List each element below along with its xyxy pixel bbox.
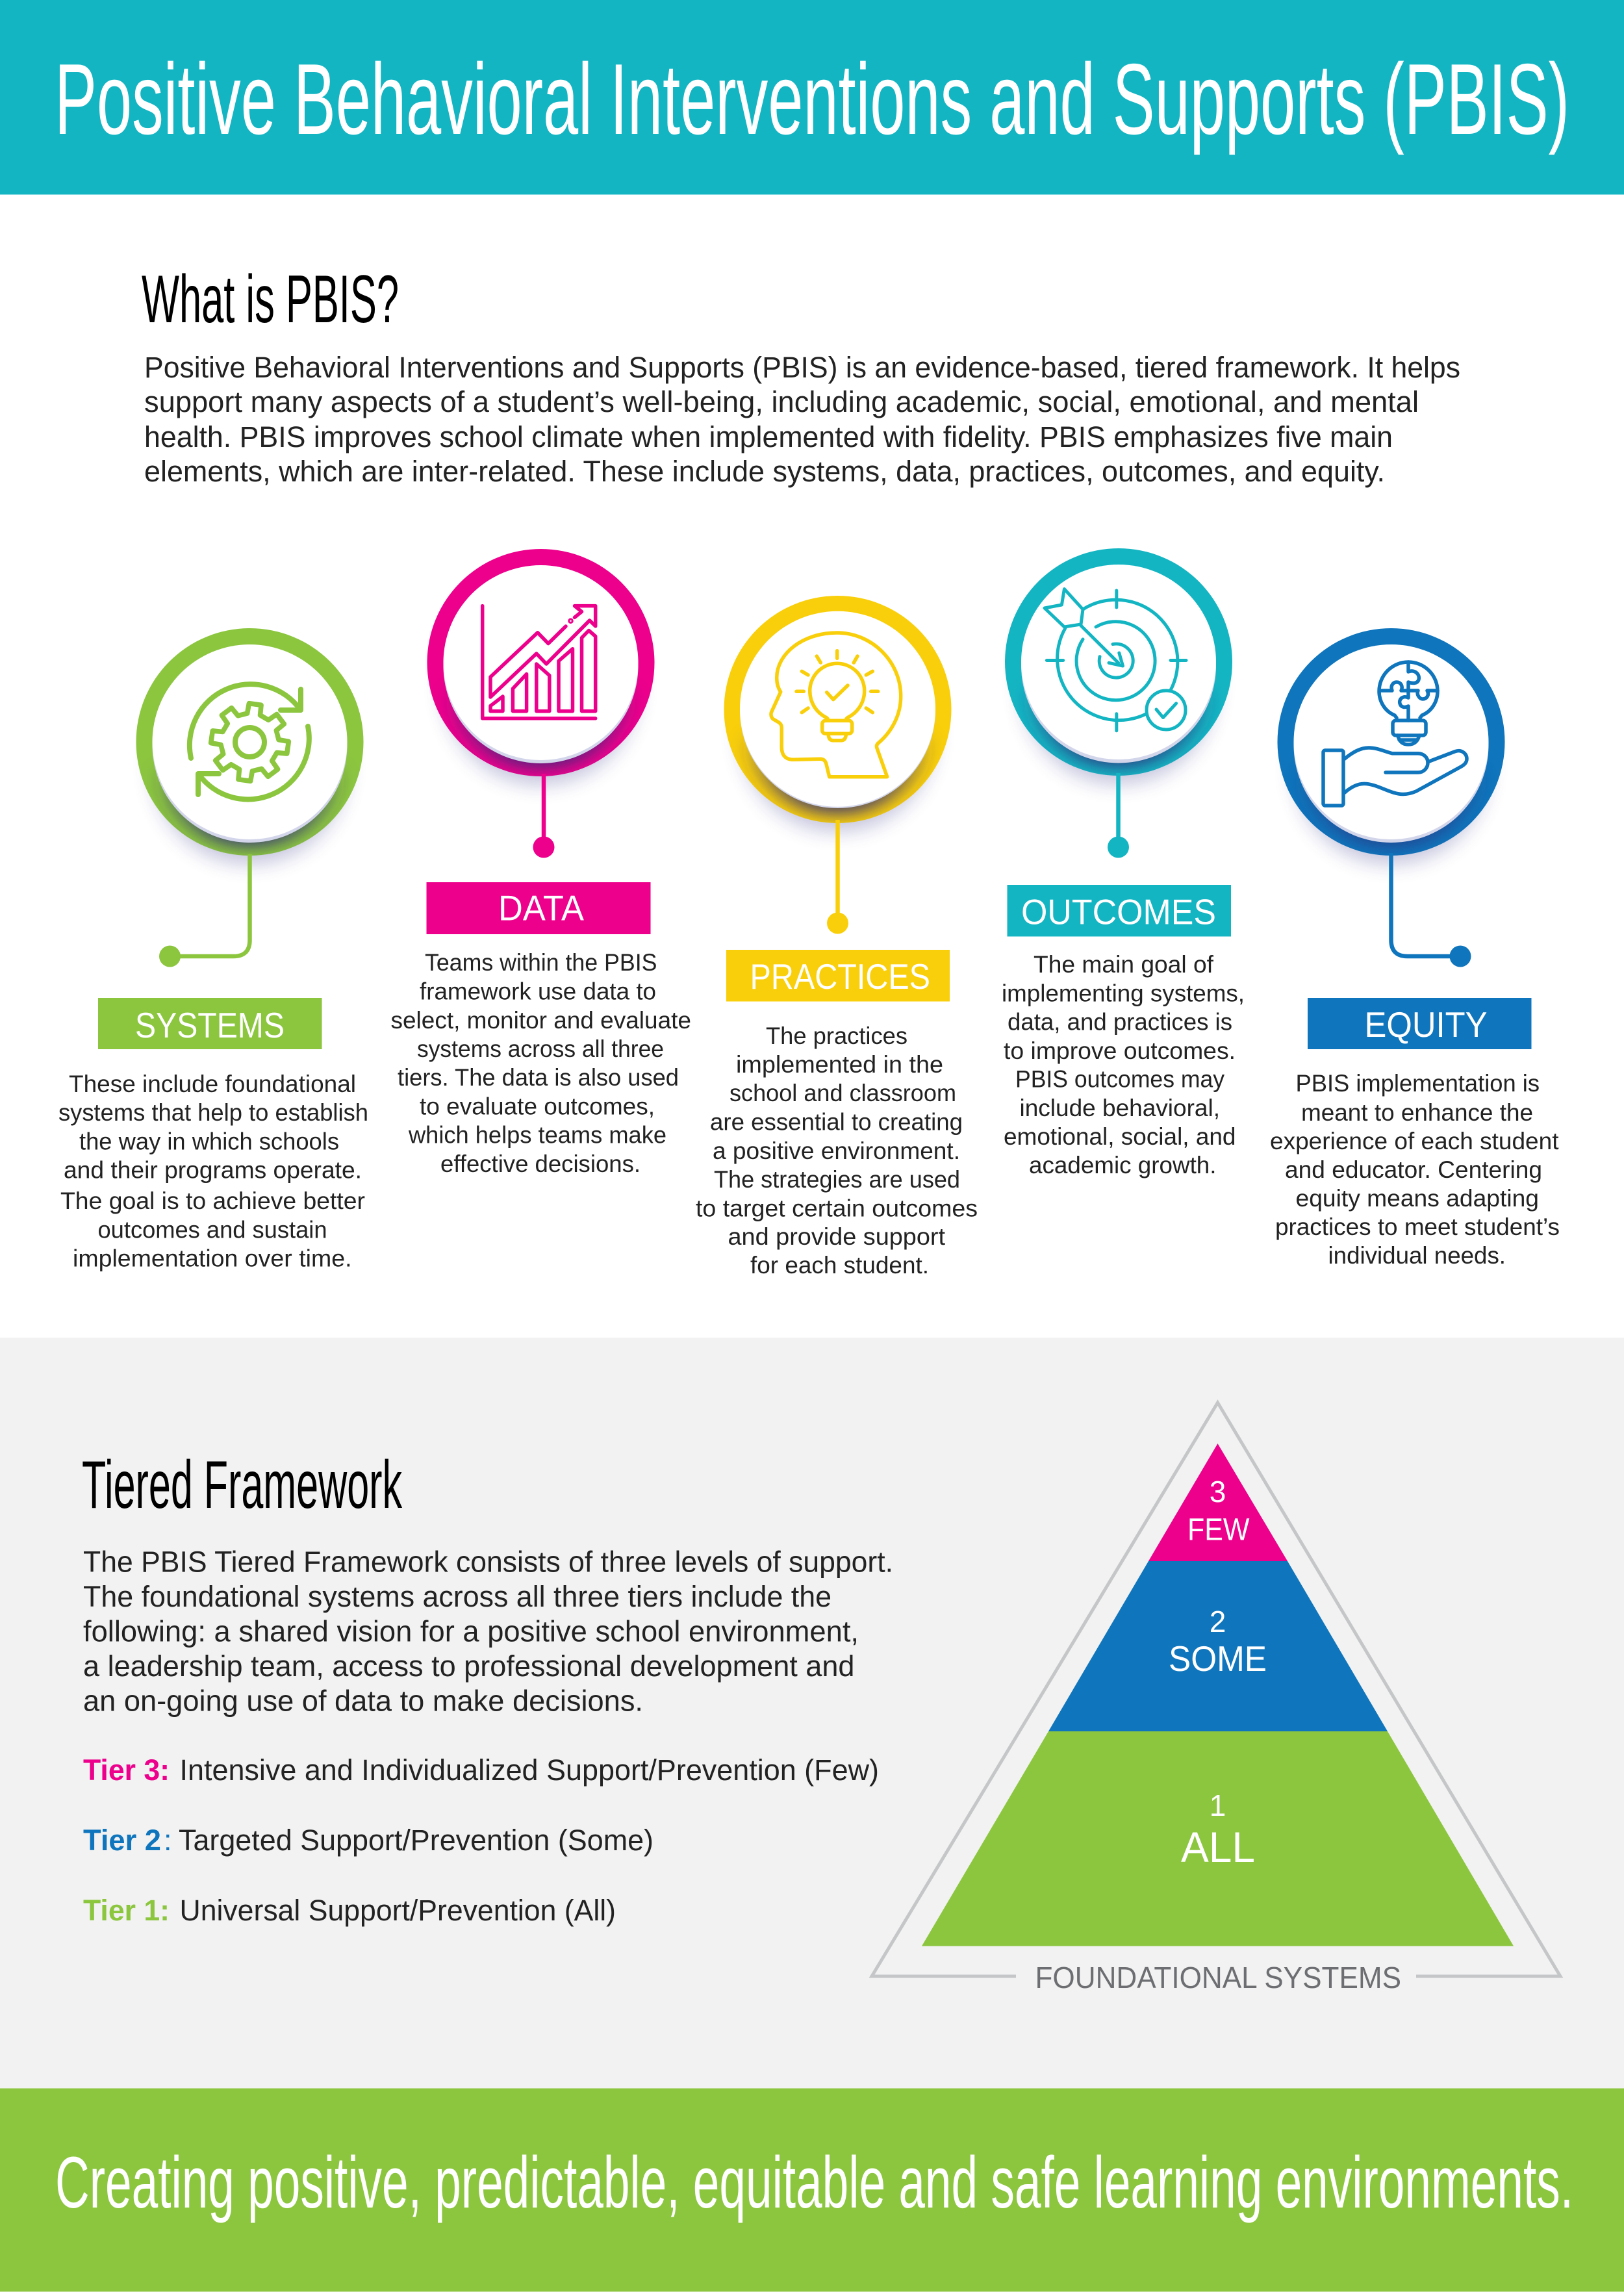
connector: systems	[159, 854, 249, 967]
text: outcomes: data, and practices is	[1008, 1008, 1232, 1036]
text: outcomes: implementing systems,	[1002, 980, 1245, 1007]
text: practices: school and classroom	[730, 1080, 956, 1106]
panel: tiered framework	[0, 1338, 1624, 2089]
tiered framework paragraph: The PBIS Tiered Framework consists of three levels of support.	[83, 1545, 893, 1579]
tier 3 segment: FEW	[1187, 1512, 1250, 1547]
tier 2 segment: SOME	[1169, 1638, 1267, 1679]
text: systems: These include foundational	[69, 1071, 356, 1097]
text: equity: practices to meet student’s	[1275, 1214, 1560, 1240]
text: outcomes	[1002, 951, 1245, 1178]
panel: systems	[58, 628, 368, 1272]
tiered framework paragraph: an on-going use of data to make decisions.	[83, 1684, 643, 1718]
panel: practices	[696, 596, 978, 1279]
icon: hand holding puzzle bulb	[1323, 662, 1467, 806]
circle badge: outcomes	[1005, 548, 1232, 784]
tier 1 line: Universal Support/Prevention (All)	[179, 1894, 616, 1927]
tier 3 segment: 3	[1210, 1475, 1226, 1509]
panel: outcomes	[1002, 548, 1245, 1178]
intro paragraph: health. PBIS improves school climate when implemented with fidelity. PBIS emphasizes five main	[144, 420, 1393, 453]
text: outcomes: to improve outcomes.	[1004, 1038, 1236, 1064]
text: practices	[696, 1023, 978, 1279]
tier 2 line: Targeted Support/Prevention (Some)	[179, 1824, 653, 1857]
circle badge: practices	[724, 596, 951, 832]
foundational systems label: FOUNDATIONAL SYSTEMS	[1035, 1961, 1401, 1994]
header banner	[0, 0, 1624, 195]
text: systems: systems that help to establish	[58, 1099, 368, 1126]
text: practices: and provide support	[728, 1223, 946, 1250]
tier 3 segment	[1148, 1444, 1288, 1561]
connector: equity	[1391, 853, 1471, 967]
text: practices: The practices	[766, 1023, 907, 1049]
tier 1 segment	[922, 1731, 1514, 1946]
text: practices: to target certain outcomes	[696, 1195, 978, 1221]
connector: practices	[827, 820, 848, 934]
label: outcomes: OUTCOMES	[1021, 891, 1216, 932]
label: equity: EQUITY	[1364, 1004, 1488, 1045]
text: equity: meant to enhance the	[1301, 1099, 1533, 1126]
circle badge: systems	[136, 628, 364, 864]
text: systems: and their programs operate.	[64, 1156, 362, 1184]
pyramid chart	[872, 1403, 1560, 1994]
text: practices: implemented in the	[736, 1051, 943, 1078]
tier 3 line: Tier 3:	[83, 1753, 170, 1787]
tiered framework paragraph	[83, 1545, 893, 1718]
icon: gear with cycle arrows	[190, 684, 309, 799]
text: outcomes: PBIS outcomes may	[1015, 1065, 1224, 1093]
icon: head with lightbulb	[771, 633, 901, 777]
tier 2 line: Tier 2	[83, 1824, 161, 1857]
connector: outcomes	[1108, 773, 1129, 858]
icon: rising bar chart	[483, 606, 596, 719]
text: systems: implementation over time.	[73, 1245, 352, 1272]
intro paragraph: elements, which are inter-related. These include systems, data, practices, outcomes, and equity.	[144, 455, 1385, 488]
text: outcomes: The main goal of	[1034, 951, 1214, 978]
label: practices: PRACTICES	[750, 956, 930, 997]
text: practices: The strategies are used	[714, 1166, 960, 1193]
pyramid outline	[872, 1403, 1560, 1976]
text: data: tiers. The data is also used	[398, 1064, 679, 1091]
icon: target with arrow	[1045, 589, 1186, 731]
connector: data	[533, 774, 555, 858]
footer banner	[0, 2088, 1624, 2292]
circle badge: equity	[1277, 628, 1504, 864]
text: equity: experience of each student	[1270, 1128, 1559, 1154]
text: outcomes: include behavioral,	[1020, 1095, 1220, 1121]
intro paragraph: Positive Behavioral Interventions and Supports (PBIS) is an evidence-based, tiered framework. It helps	[144, 351, 1460, 384]
tier 2 line: :	[164, 1824, 172, 1857]
text: data	[391, 949, 691, 1177]
heading: What is PBIS?: What is PBIS?	[142, 262, 399, 337]
text: data: select, monitor and evaluate	[391, 1007, 691, 1034]
text: data: to evaluate outcomes,	[420, 1093, 655, 1120]
panel: data	[391, 549, 691, 1177]
label: systems: SYSTEMS	[135, 1005, 285, 1045]
tiered framework paragraph: The foundational systems across all three tiers include the	[83, 1580, 831, 1613]
label: data	[426, 882, 651, 934]
text: systems: The goal is to achieve better	[60, 1188, 365, 1214]
text: practices: a positive environment.	[713, 1138, 960, 1164]
label: systems	[98, 998, 322, 1049]
tier 2 segment	[1048, 1561, 1388, 1731]
text: data: framework use data to	[420, 978, 656, 1004]
text: equity	[1270, 1070, 1560, 1269]
text: outcomes: academic growth.	[1029, 1152, 1216, 1178]
panel: equity	[1270, 628, 1560, 1269]
text: data: effective decisions.	[440, 1151, 641, 1177]
text: practices: for each student.	[750, 1252, 929, 1279]
tier 1 segment: ALL	[1181, 1823, 1255, 1871]
tier 1 segment: 1	[1210, 1789, 1226, 1822]
label: data: DATA	[498, 887, 584, 928]
text: outcomes: emotional, social, and	[1004, 1123, 1236, 1150]
text: equity: individual needs.	[1328, 1242, 1506, 1269]
text: data: Teams within the PBIS	[425, 949, 657, 976]
text: equity: equity means adapting	[1295, 1185, 1539, 1212]
text: equity: PBIS implementation is	[1295, 1070, 1540, 1097]
circle badge: data	[427, 549, 655, 785]
text: systems: the way in which schools	[79, 1128, 339, 1155]
tier 1 line: Tier 1:	[83, 1894, 170, 1927]
tiered framework paragraph: a leadership team, access to professional development and	[83, 1649, 855, 1683]
text: equity: and educator. Centering	[1285, 1156, 1542, 1183]
intro paragraph	[144, 351, 1460, 488]
label: practices	[726, 950, 950, 1002]
tier 3 line: Intensive and Individualized Support/Prevention (Few)	[179, 1753, 879, 1787]
label: equity	[1308, 998, 1532, 1049]
text: systems: outcomes and sustain	[97, 1216, 327, 1243]
tiered framework paragraph: following: a shared vision for a positive school environment,	[83, 1615, 859, 1648]
text: data: which helps teams make	[408, 1121, 666, 1149]
text: data: systems across all three	[417, 1036, 664, 1062]
text: practices: are essential to creating	[710, 1108, 963, 1136]
intro paragraph: support many aspects of a student’s well-being, including academic, social, emotional, and mental	[144, 385, 1419, 418]
tier 2 segment: 2	[1210, 1605, 1226, 1638]
text: systems	[58, 1071, 368, 1272]
heading: Tiered Framework: Tiered Framework	[82, 1447, 403, 1523]
